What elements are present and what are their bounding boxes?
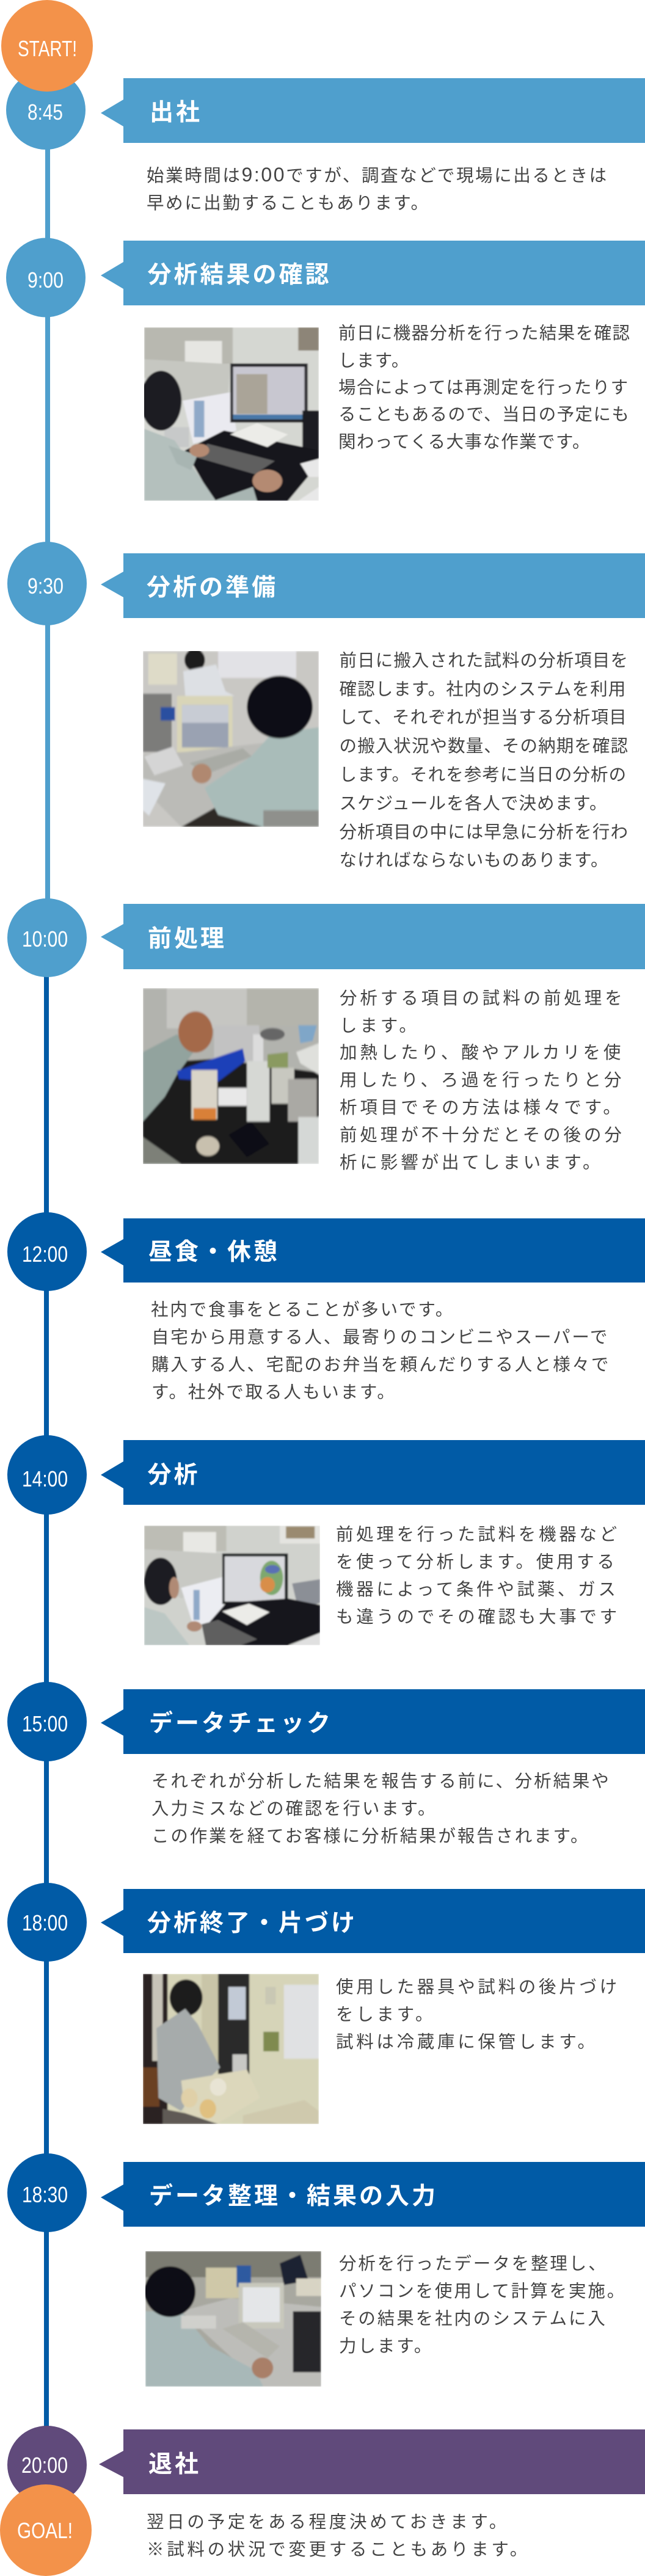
text: 14:00: 前処理を行った試料を機器など [336,1525,620,1545]
text: 10:00: 用したり、ろ過を行ったりと分 [340,1071,624,1090]
time badge 10:00 [7,898,87,977]
text: 10:00 [340,989,625,1173]
text: 20:00 [147,2512,530,2560]
banner: 昼食・休憩 [101,1218,645,1283]
photo: tidying samples [143,1974,319,2124]
text: 18:00: をします。 [336,2005,435,2025]
banner: データ整理・結果の入力: データ整理・結果の入力 [149,2183,438,2210]
text: 9:30: の搬入状況や数量、その納期を確認 [340,737,629,756]
text: 18:00: 使用した器具や試料の後片づけ [336,1977,620,1997]
time badge 18:00: 18:00 [22,1910,68,1935]
text: 9:00: 場合によっては再測定を行ったりす [338,378,629,398]
text: 9:30: 確認します。社内のシステムを利用 [340,680,626,699]
time badge 18:30 [7,2153,87,2232]
text: 9:30: なければならないものあります。 [340,851,609,870]
time badge 14:00: 14:00 [22,1466,68,1491]
banner: 前処理 [101,904,645,969]
timeline line: morning (light blue) [45,147,50,910]
text: 9:00: 前日に機器分析を行った結果を確認 [338,324,630,343]
text: 14:00 [336,1525,620,1627]
text: 12:00: 自宅から用意する人、最寄りのコンビニやスーパーで [151,1328,609,1347]
banner: 出社: 出社 [150,100,202,126]
text: 18:30: 分析を行ったデータを整理し、 [339,2254,608,2274]
text: 10:00: 分析する項目の試料の前処理を [340,989,625,1008]
time badge 20:00 [7,2426,87,2504]
text: 9:30: 前日に搬入された試料の分析項目を [340,651,629,671]
text: 10:00: 前処理が不十分だとその後の分 [340,1126,625,1145]
banner: 分析終了・片づけ [101,1889,645,1953]
text: 15:00: それぞれが分析した結果を報告する前に、分析結果や [151,1772,611,1791]
text: 18:30: パソコンを使用して計算を実施。 [339,2282,626,2301]
start badge: START! [18,36,77,61]
text: 9:00 [338,324,630,452]
banner: データチェック: データチェック [149,1710,333,1737]
time badge 18:30: 18:30 [22,2182,68,2207]
time badge 9:30 [7,542,87,625]
banner: 退社 [99,2429,645,2494]
banner: 分析結果の確認 [101,241,645,305]
text: 18:30 [339,2254,626,2356]
time badge 12:00 [7,1212,87,1291]
text: 14:00: 機器によって条件や試薬、ガス [336,1580,619,1599]
banner: 退社: 退社 [148,2451,201,2478]
time badge 8:45: 8:45 [27,100,63,125]
step: 12:00 昼食・休憩 [7,1212,645,1402]
text: 20:00: ※試料の状況で変更することもあります。 [147,2540,530,2560]
text: 10:00: 析項目でその方法は様々です。 [340,1098,624,1118]
banner: 分析の準備 [101,553,645,618]
banner: 分析の準備: 分析の準備 [147,575,278,601]
text: 15:00: この作業を経てお客様に分析結果が報告されます。 [151,1827,589,1846]
time badge 9:00: 9:00 [27,267,64,293]
photo: checking results at monitor [140,327,319,501]
text: 8:45: 早めに出勤することもあります。 [147,194,430,213]
time badge 18:00 [7,1883,87,1962]
text: 14:00: も違うのでその確認も大事です [336,1607,620,1627]
text: 10:00: します。 [340,1016,420,1036]
text: 9:00: 関わってくる大事な作業です。 [338,432,591,452]
text: 12:00: 購入する人、宅配のお弁当を頼んだりする人と様々で [151,1355,610,1375]
banner: データチェック [101,1689,645,1754]
time badge 20:00: 20:00 [21,2453,68,2478]
goal badge: GOAL! [17,2518,73,2543]
banner: 分析結果の確認: 分析結果の確認 [148,262,332,288]
banner: 分析終了・片づけ: 分析終了・片づけ [147,1910,357,1937]
time badge 8:45 [6,70,86,150]
text: 9:30: スケジュールを各人で決めます。 [340,794,608,813]
banner: データ整理・結果の入力 [101,2162,645,2227]
text: 9:00: ることもあるので、当日の予定にも [338,405,630,424]
step: 9:30 分析の準備 [7,542,645,870]
timeline line: daytime (dark blue) [44,971,49,2437]
time badge 14:00 [7,1435,87,1515]
text: 9:30: して、それぞれが担当する分析項目 [340,708,627,727]
photo: preparing analysis at computer [143,649,319,827]
step: 9:00 分析結果の確認 [6,238,645,501]
time badge 9:30: 9:30 [27,573,64,599]
step: 10:00 前処理 [7,898,645,1173]
text: 8:45: 始業時間は9:00ですが、調査などで現場に出るときは [147,164,608,186]
time badge 12:00: 12:00 [22,1242,68,1267]
banner: 昼食・休憩: 昼食・休憩 [148,1239,280,1265]
text: 12:00 [151,1300,610,1402]
banner: 出社 [101,78,645,143]
text: 14:00: を使って分析します。使用する [336,1552,618,1572]
text: 18:30: その結果を社内のシステムに入 [339,2309,607,2329]
goal badge [0,2484,92,2576]
step: 8:45 出社 [6,70,645,213]
banner: 分析 [101,1440,645,1505]
time badge 15:00: 15:00 [22,1711,68,1736]
step: 14:00 分析 [7,1435,645,1645]
text: 9:30: します。それを参考に当日の分析の [340,765,627,785]
step: 15:00 データチェック [7,1682,645,1846]
text: 9:30 [340,651,629,870]
text: 15:00: 入力ミスなどの確認を行います。 [151,1799,437,1819]
text: 9:30: 分析項目の中には早急に分析を行わ [340,823,629,842]
photo: pretreating samples [143,988,319,1164]
banner: 前処理: 前処理 [148,926,227,952]
time badge 10:00: 10:00 [22,926,68,951]
text: 8:45 [147,164,608,213]
step: 18:30 データ整理・結果の入力 [7,2153,645,2387]
text: 10:00: 加熱したり、酸やアルカリを使 [340,1043,624,1063]
banner: 分析: 分析 [148,1462,200,1488]
text: 10:00: 析に影響が出てしまいます。 [340,1153,603,1173]
text: 18:30: 力します。 [339,2337,433,2356]
text: 15:00 [151,1772,611,1846]
photo: analysing on instrument [144,1526,320,1645]
photo: entering data on PC [145,2251,321,2387]
text: 18:00: 試料は冷蔵庫に保管します。 [336,2032,598,2052]
time badge 15:00 [7,1682,87,1761]
text: 12:00: 社内で食事をとることが多いです。 [151,1300,454,1320]
text: 18:00 [336,1977,620,2052]
step: 18:00 分析終了・片づけ [7,1883,645,2124]
text: 9:00: します。 [338,351,410,371]
time badge 9:00 [6,238,86,318]
text: 12:00: す。社外で取る人もいます。 [151,1383,396,1402]
text: 20:00: 翌日の予定をある程度決めておきます。 [147,2512,509,2532]
step: 20:00 退社 [7,2426,645,2560]
start badge [1,0,93,92]
